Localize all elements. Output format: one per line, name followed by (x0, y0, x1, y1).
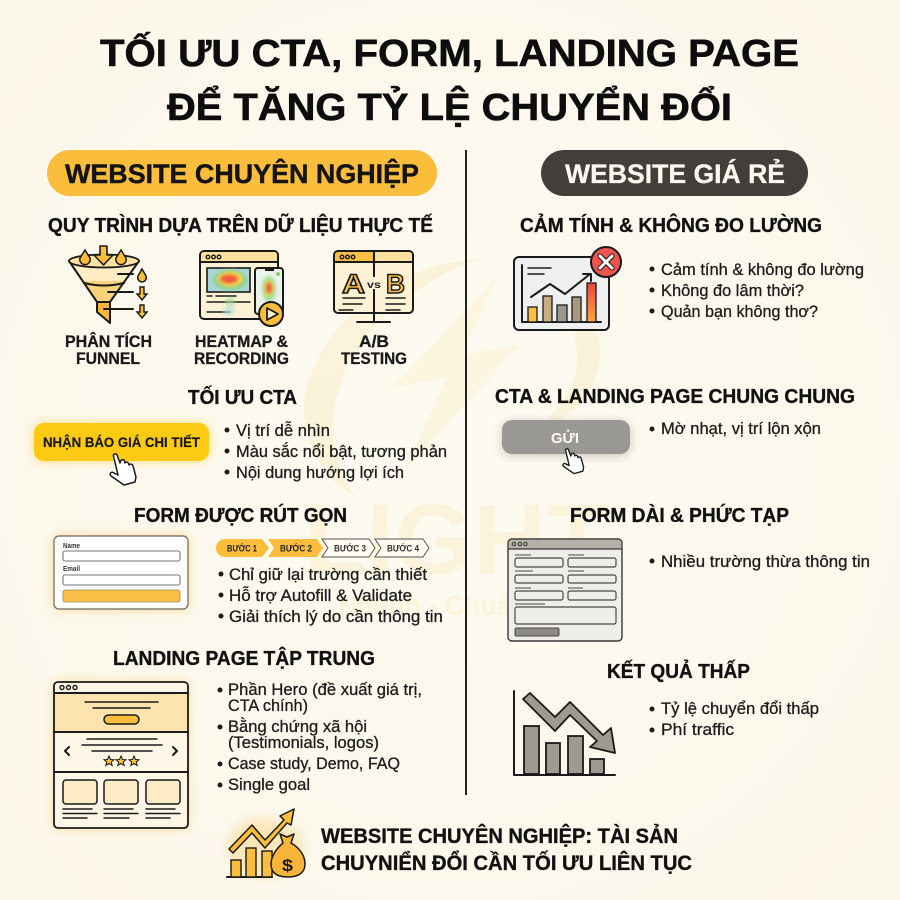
label: heatmap & recording: RECORDING (194, 350, 289, 368)
list: landing page bullets: CTA chính) (228, 696, 308, 715)
list: landing page bullets: Single goal (228, 775, 310, 794)
steps: progress chevrons: BƯỚC 1 (227, 542, 258, 554)
watermark: logo and brand (304, 259, 608, 621)
watermark: logo and brand: Nhanh - Chuẩn - Đẹp (338, 590, 602, 621)
heading: form được rút gọn: FORM ĐƯỢC RÚT GỌN (134, 503, 347, 527)
list: cảm tính bullets: Quản bạn không thơ? (661, 302, 818, 321)
label: heatmap & recording (194, 333, 289, 368)
conclusion banner (227, 809, 692, 878)
cta button: nhận báo giá (34, 423, 209, 485)
panel: website giá rẻ (495, 150, 870, 775)
list: form bullets (218, 565, 443, 626)
icon: a/b testing: B (386, 269, 405, 299)
label: a/b testing: TESTING (341, 350, 407, 368)
panel: website chuyên nghiệp (34, 150, 447, 828)
cta button: nhận báo giá: NHẬN BÁO GIÁ CHI TIẾT (43, 433, 200, 450)
pill heading: website chuyên nghiệp: WEBSITE CHUYÊN NGHIỆP (65, 158, 419, 189)
list: landing page bullets: Bằng chứng xã hội (228, 717, 367, 736)
heading: kết quả thấp: KẾT QUẢ THẤP (607, 660, 750, 683)
icon: declining chart (514, 691, 615, 775)
heading: cta & landing page chung chung: CTA & LANDING PAGE CHUNG CHUNG (495, 386, 855, 408)
steps: progress chevrons (216, 539, 429, 557)
icon: short form: Name (63, 543, 80, 550)
list: result bullets (650, 699, 819, 739)
pill heading: website giá rẻ (541, 150, 808, 196)
icon: growth and money bag (227, 809, 305, 878)
title: ĐỂ TĂNG TỶ LỆ CHUYỂN ĐỔI (167, 84, 732, 129)
steps: progress chevrons: BƯỚC 3 (334, 542, 366, 554)
list: cta bullets: Vị trí dễ nhìn (236, 421, 330, 440)
icon: short form (54, 536, 188, 609)
icon: funnel (69, 246, 147, 323)
pill heading: website chuyên nghiệp (47, 150, 437, 196)
list: form bullets: Giải thích lý do cần thông tin (229, 607, 443, 626)
list: cta bullet: Mờ nhạt, vị trí lộn xộn (661, 419, 821, 438)
list: cảm tính bullets: Cảm tính & không đo lường (661, 260, 864, 279)
label: heatmap & recording: HEATMAP & (195, 333, 288, 351)
heading: form dài & phức tạp: FORM DÀI & PHỨC TẠP (570, 503, 789, 527)
steps: progress chevrons: BƯỚC 4 (387, 542, 420, 554)
icon: heatmap and recording (200, 251, 283, 326)
icon: unmeasured chart (514, 247, 621, 330)
conclusion text: CHUYNIỂN ĐỔI CẦN TỐI ƯU LIÊN TỤC (321, 851, 692, 875)
heading: landing page tập trung: LANDING PAGE TẬP TRUNG (113, 646, 375, 670)
heading: cảm tính: CẢM TÍNH & KHÔNG ĐO LƯỜNG (520, 213, 822, 237)
conclusion text: WEBSITE CHUYÊN NGHIỆP: TÀI SẢN (321, 824, 678, 848)
icon: a/b testing (334, 251, 413, 322)
label: phân tích funnel (65, 332, 152, 368)
icon: landing page wireframe (54, 682, 188, 828)
heading: tối ưu cta: TỐI ƯU CTA (188, 385, 297, 409)
list: form bullet: Nhiều trường thừa thông tin (661, 552, 870, 571)
label: phân tích funnel: FUNNEL (76, 350, 140, 368)
list: result bullets: Phí traffic (661, 720, 735, 739)
conclusion text (321, 824, 692, 875)
pill heading: website giá rẻ: WEBSITE GIÁ RẺ (565, 157, 785, 189)
cta button: gửi (502, 420, 630, 474)
label: phân tích funnel: PHÂN TÍCH (65, 332, 152, 351)
list: landing page bullets: Phần Hero (đề xuất giá trị, (228, 680, 422, 699)
list: cảm tính bullets: Không đo lâm thời? (661, 281, 804, 300)
icon: a/b testing: A (342, 269, 365, 299)
list: landing page bullets: (Testimonials, logos) (228, 733, 379, 752)
icon: long form (508, 539, 622, 641)
watermark: logo and brand: LIGHT (304, 484, 608, 596)
title: TỐI ƯU CTA, FORM, LANDING PAGE (100, 30, 799, 75)
list: cta bullets: Nội dung hướng lợi ích (236, 463, 404, 482)
list: form bullets: Chỉ giữ lại trường cần thiết (229, 565, 427, 584)
icon: growth and money bag: $ (282, 856, 294, 875)
icon: short form: Email (63, 566, 80, 573)
steps: progress chevrons: BƯỚC 2 (280, 542, 312, 554)
heading: quy trình: QUY TRÌNH DỰA TRÊN DỮ LIỆU THỰC TẾ (48, 213, 433, 237)
icon: hand cursor (563, 449, 584, 474)
icon: hand cursor (110, 454, 136, 485)
list: cảm tính bullets (650, 260, 864, 321)
list: cta bullets: Màu sắc nổi bật, tương phản (236, 442, 447, 461)
list: landing page bullets: Case study, Demo, FAQ (228, 754, 400, 773)
icon: a/b testing: vs (367, 280, 382, 291)
cta button: gửi: GỬI (551, 429, 579, 447)
list: cta bullets (224, 421, 447, 482)
list: landing page bullets (218, 680, 422, 794)
list: result bullets: Tỷ lệ chuyển đổi thấp (661, 699, 819, 718)
label: a/b testing: A/B (359, 333, 389, 351)
list: form bullets: Hỗ trợ Autofill & Validate (229, 586, 412, 605)
label: a/b testing (341, 333, 407, 368)
title (100, 30, 799, 129)
